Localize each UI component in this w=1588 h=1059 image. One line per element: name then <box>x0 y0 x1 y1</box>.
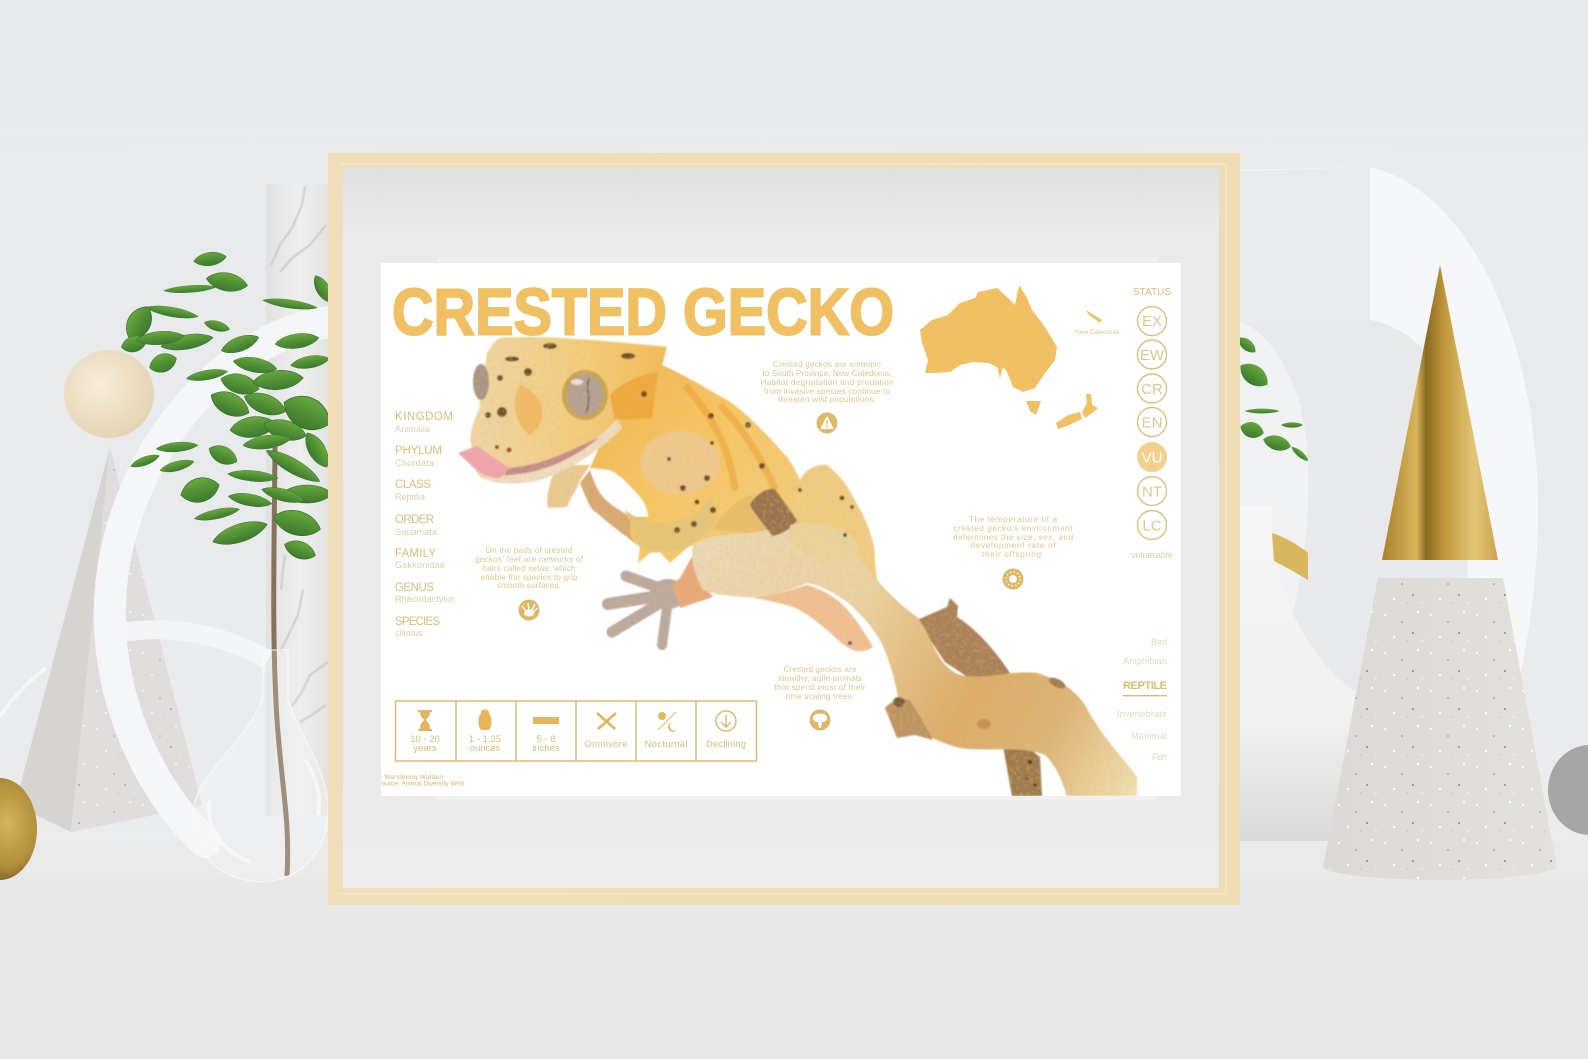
status CR: CR <box>1141 381 1163 398</box>
stat: length: inches <box>532 743 560 754</box>
stat: length <box>532 717 560 754</box>
lower jaw <box>480 419 622 484</box>
conservation status <box>1131 287 1173 561</box>
plant stem <box>274 447 288 876</box>
class <box>395 479 431 502</box>
large white arc <box>110 322 330 842</box>
kingdom <box>395 411 453 434</box>
arch inner face <box>1240 320 1470 700</box>
species: SPECIES <box>395 616 440 628</box>
map: Australia <box>920 285 1057 392</box>
stat: lifespan: 10 - 20 <box>410 734 440 745</box>
status EW <box>1138 340 1166 369</box>
fact: arboreal: Crested geckos are <box>784 665 857 674</box>
hind foot over branch <box>790 523 858 568</box>
plant leaves <box>119 250 337 564</box>
kingdom: Animalia <box>395 424 431 434</box>
front arm left <box>547 465 590 508</box>
stat: activity <box>644 712 688 750</box>
wooden ball <box>64 350 154 438</box>
species <box>395 616 440 638</box>
selected class: REPTILE <box>1123 680 1167 692</box>
belly <box>750 585 873 651</box>
title: CRESTED GECKO <box>392 274 894 348</box>
map: New Zealand north <box>1082 394 1098 418</box>
left eye <box>473 364 489 400</box>
fact: temperature <box>953 515 1073 590</box>
opening with leaves <box>1240 322 1308 612</box>
status EN <box>1138 408 1166 436</box>
order: Squamata <box>395 527 438 537</box>
kingdom: KINGDOM <box>395 411 453 423</box>
fact: habitat threat: to South Province, New Caledonia. <box>762 369 892 378</box>
main body <box>589 350 801 564</box>
fact: temperature: development rate of <box>970 541 1056 550</box>
order: ORDER <box>395 514 434 526</box>
poster <box>377 263 1181 796</box>
icon: tree <box>810 710 830 730</box>
glass ring <box>0 668 46 716</box>
poster shadow sheet <box>437 257 1157 800</box>
stat: weight <box>469 710 501 754</box>
genus <box>395 582 455 604</box>
back branch <box>917 598 1010 682</box>
white arch sculpture <box>1240 167 1538 841</box>
map: New Caledonia <box>1086 310 1102 323</box>
front arm right <box>579 470 648 544</box>
marble column <box>266 184 332 816</box>
mouth <box>503 437 600 475</box>
left still-life decoration <box>0 184 337 882</box>
shoulder scale patch <box>640 431 720 495</box>
white arch lower part <box>1240 506 1400 841</box>
grey stone <box>1548 745 1588 835</box>
lower stick <box>1003 745 1042 796</box>
rear foot <box>608 576 686 645</box>
status LC: LC <box>1142 518 1162 534</box>
leaves behind frame <box>1240 338 1308 461</box>
fact: habitat threat: from invasive species continue to <box>764 387 890 396</box>
fact: arboreal: that spend most of their <box>774 683 866 692</box>
genus: GENUS <box>395 582 434 594</box>
genus: Rhacodactylus <box>395 594 455 604</box>
fact: habitat threat: Crested geckos are endemic <box>773 360 881 369</box>
fact: temperature: determines the size, sex, and <box>953 533 1073 542</box>
rear leg <box>672 555 717 608</box>
animal class list <box>1117 637 1167 762</box>
branch knob <box>885 699 933 740</box>
branch stub through body <box>750 489 797 536</box>
phylum <box>395 445 442 468</box>
family: FAMILY <box>395 548 436 560</box>
fact: setae <box>475 546 584 620</box>
status CR <box>1138 374 1166 403</box>
stat: diet <box>584 713 628 750</box>
species: ciliatus <box>395 628 423 638</box>
hind leg <box>790 465 877 580</box>
branch dents <box>893 676 1067 729</box>
taxonomy list <box>395 411 455 638</box>
credits: Source: Animal Diversity Web <box>377 780 464 788</box>
order <box>395 514 438 537</box>
gecko on branch illustration <box>458 337 1137 796</box>
stats strip <box>396 701 756 761</box>
speckled cone <box>1323 578 1557 880</box>
stat boxes grid <box>396 701 756 761</box>
status heading: STATUS <box>1133 287 1171 298</box>
hollow under back <box>714 496 799 532</box>
credits: © Wandering Walden <box>377 773 443 781</box>
class: CLASS <box>395 479 431 491</box>
stat: lifespan <box>410 710 440 754</box>
range map <box>920 285 1119 429</box>
status VU highlighted <box>1137 442 1167 472</box>
stat: lifespan: years <box>413 743 437 754</box>
stat: activity: Nocturnal <box>644 739 688 750</box>
gold tube <box>1272 533 1308 580</box>
right still-life decoration <box>1235 167 1588 880</box>
animal class list: Bird <box>1151 637 1167 647</box>
stat: population trend: Declining <box>706 739 746 750</box>
fact: temperature: The temperature of a <box>969 515 1057 524</box>
fact: temperature: their offspring. <box>982 550 1044 559</box>
fact: setae: hairs called setae, which <box>482 564 576 573</box>
animal class list: Fish <box>1152 752 1167 762</box>
stat: weight: ounces <box>470 743 501 754</box>
gold cone <box>1382 265 1498 560</box>
class: Reptilia <box>395 492 426 502</box>
status EN: EN <box>1142 414 1162 432</box>
orange forehead blotches <box>515 385 542 435</box>
gecko spots <box>485 343 854 645</box>
status word: vulnerable <box>1131 550 1173 561</box>
animal class list: Invertebrate <box>1117 709 1167 719</box>
back stripes <box>685 385 775 490</box>
icon: sun <box>1002 568 1024 590</box>
family <box>395 548 445 570</box>
gold ball <box>0 778 37 880</box>
fact: arboreal <box>774 665 866 730</box>
glass vase <box>193 650 328 882</box>
fact: setae: smooth surfaces. <box>497 581 561 590</box>
status EX: EX <box>1142 313 1162 330</box>
fact: habitat threat: threaten wild populations. <box>778 395 876 404</box>
animal class list: Amphibian <box>1123 656 1167 666</box>
status NT <box>1138 476 1166 506</box>
stat: length: 5 - 8 <box>536 734 556 745</box>
main branch <box>692 527 1137 796</box>
fact: setae: geckos' feet are networks of <box>475 555 584 564</box>
map: New Zealand south <box>1056 412 1082 429</box>
icon: warning <box>816 412 838 434</box>
tongue <box>458 446 510 478</box>
family: Gekkonidae <box>395 560 445 570</box>
fact: setae: On the pads of crested <box>486 546 573 555</box>
status EX <box>1138 306 1166 336</box>
right eye <box>562 370 608 420</box>
speckled pyramid <box>15 447 202 832</box>
stat: weight: 1 - 1.25 <box>469 734 501 745</box>
credits <box>377 773 464 788</box>
label: New Caledonia: New Caledonia <box>1075 329 1119 336</box>
phylum: PHYLUM <box>395 445 442 457</box>
fact: temperature: crested gecko's environment <box>954 524 1073 533</box>
fact: habitat threat: Habitat degradation and predation <box>760 378 894 387</box>
status NT: NT <box>1142 484 1162 500</box>
animal class list: Mammal <box>1131 731 1167 741</box>
status LC <box>1138 510 1166 540</box>
stat: population trend <box>706 711 746 750</box>
fact: arboreal: time scaling trees. <box>786 692 854 701</box>
head <box>470 337 667 483</box>
arch top face <box>1240 167 1370 322</box>
wooden frame <box>328 153 1240 905</box>
orange cheek <box>610 372 658 420</box>
fact: setae: enable the species to grip <box>480 573 578 582</box>
stat: diet: Omnivore <box>584 739 628 750</box>
phylum: Chordata <box>395 458 435 468</box>
small white ring <box>125 630 268 660</box>
fact: arboreal: stealthy, agile animals <box>778 674 862 683</box>
forearm patch <box>625 495 716 552</box>
status EW: EW <box>1140 347 1165 364</box>
fact: habitat threat <box>760 360 894 434</box>
status VU highlighted: VU <box>1142 450 1162 466</box>
map: Tasmania <box>1026 401 1041 415</box>
icon: gecko foot <box>518 600 540 620</box>
